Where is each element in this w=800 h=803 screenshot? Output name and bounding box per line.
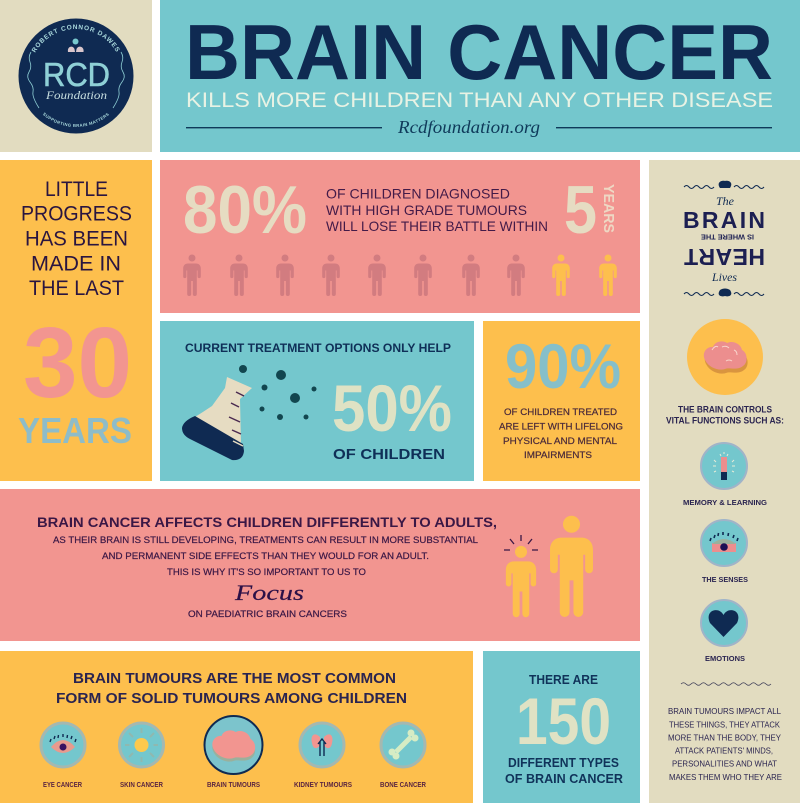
logo badge: SUPPORTING BRAIN MATTERS (43, 112, 109, 127)
description: DIFFERENT TYPES (508, 756, 619, 770)
heading: BRAIN CANCER AFFECTS CHILDREN DIFFERENTLY TO ADULTS, (37, 515, 497, 530)
body text: AND PERMANENT SIDE EFFECTS THAN THEY WOULD FOR AN ADULT. (102, 551, 429, 562)
icon: memory (701, 443, 747, 489)
body text (53, 535, 478, 620)
logo badge: Foundation (45, 88, 107, 102)
years label: YEARS (18, 410, 132, 451)
label: emotions: EMOTIONS (705, 654, 745, 663)
description (505, 756, 623, 786)
icon: eye cancer (41, 723, 85, 767)
icon labels: BRAIN TUMOURS (207, 782, 260, 789)
progress text (21, 178, 132, 300)
description: WILL LOSE THEIR BATTLE WITHIN (326, 218, 548, 234)
icon: flask (182, 365, 316, 460)
icon: brain tumours (204, 716, 262, 774)
stat: 90%: 90% (505, 332, 621, 402)
icon labels: EYE CANCER (43, 782, 82, 789)
icon labels: SKIN CANCER (120, 782, 163, 789)
controls text: THE BRAIN CONTROLS (678, 404, 772, 414)
progress text: THE LAST (29, 277, 124, 300)
description: OF CHILDREN TREATED (504, 407, 617, 418)
logo badge: RCD (43, 56, 110, 93)
heading: FORM OF SOLID TUMOURS AMONG CHILDREN (56, 691, 407, 707)
closing paragraph: BRAIN TUMOURS IMPACT ALL (668, 706, 781, 716)
icon: senses (701, 520, 747, 566)
label: memory: MEMORY & LEARNING (683, 498, 767, 507)
stat: 50%: 50% (332, 371, 452, 445)
icon: kidney tumours (300, 723, 344, 767)
heading (56, 671, 407, 707)
logo badge: ROBERT CONNOR DAWES (32, 24, 120, 52)
icon labels: BONE CANCER (380, 782, 426, 789)
number: 30: 30 (23, 307, 132, 419)
brain heart motto: Lives (711, 270, 737, 284)
description (326, 186, 548, 234)
icon: heart (701, 600, 747, 646)
closing paragraph: MORE THAN THE BODY, THEY (668, 732, 781, 742)
panel: common tumours (0, 651, 473, 803)
controls text: VITAL FUNCTIONS SUCH AS: (666, 416, 784, 426)
closing paragraph: THESE THINGS, THEY ATTACK (669, 720, 780, 730)
description: OF CHILDREN DIAGNOSED (326, 186, 510, 202)
panel: logo (0, 0, 152, 152)
of children: OF CHILDREN (333, 446, 445, 463)
brain heart motto: The (716, 194, 735, 208)
brain heart motto: HEART (684, 244, 765, 270)
subtitle: KILLS MORE CHILDREN THAN ANY OTHER DISEASE (186, 89, 773, 112)
brain heart motto: BRAIN (683, 207, 765, 233)
brain heart motto: IS WHERE THE (701, 232, 754, 242)
closing paragraph: PERSONALITIES AND WHAT (672, 758, 777, 768)
icon: bone cancer (381, 723, 425, 767)
progress text: PROGRESS (21, 202, 132, 226)
icon labels (43, 782, 426, 789)
stat: 80%: 80% (183, 172, 307, 248)
controls text (666, 404, 784, 426)
stat: 150: 150 (516, 684, 611, 758)
heading: CURRENT TREATMENT OPTIONS ONLY HELP (185, 343, 451, 355)
progress text: LITTLE (45, 178, 108, 201)
panel: 80 percent (160, 160, 640, 313)
icon: skin cancer (120, 723, 164, 767)
brain heart motto (683, 181, 765, 296)
body text: Focus (234, 580, 304, 605)
stat: 5: 5 (564, 172, 597, 248)
years vertical: YEARS (600, 184, 617, 233)
label: senses: THE SENSES (702, 575, 748, 584)
panel: 90 percent (483, 321, 640, 481)
icon labels: KIDNEY TUMOURS (294, 782, 352, 789)
panel: 150 types (483, 651, 640, 803)
panel: little progress (0, 160, 152, 481)
panel: treatment (160, 321, 474, 481)
website: Rcdfoundation.org (397, 117, 540, 137)
body text: AS THEIR BRAIN IS STILL DEVELOPING, TREATMENTS CAN RESULT IN MORE SUBSTANTIAL (53, 535, 478, 546)
description: WITH HIGH GRADE TUMOURS (326, 202, 527, 218)
panel: sidebar (649, 160, 800, 803)
icon: child and adult (504, 516, 593, 617)
body text: THIS IS WHY IT'S SO IMPORTANT TO US TO (167, 567, 366, 578)
progress text: MADE IN (31, 252, 121, 276)
description: OF BRAIN CANCER (505, 772, 623, 786)
description: PHYSICAL AND MENTAL (503, 436, 617, 447)
people row (183, 254, 617, 296)
panel: header (160, 0, 800, 152)
logo badge (18, 18, 134, 134)
panel: differently to adults (0, 489, 640, 641)
closing paragraph: ATTACK PATIENTS' MINDS, (675, 746, 773, 756)
title: BRAIN CANCER (185, 8, 773, 96)
description (499, 407, 623, 461)
description: ARE LEFT WITH LIFELONG (499, 422, 623, 432)
closing paragraph (668, 706, 782, 782)
icon: brain (687, 319, 763, 395)
description: IMPAIRMENTS (524, 450, 592, 461)
there are: THERE ARE (529, 673, 598, 687)
progress text: HAS BEEN (25, 228, 128, 250)
heading: BRAIN TUMOURS ARE THE MOST COMMON (73, 671, 396, 687)
closing paragraph: MAKES THEM WHO THEY ARE (669, 772, 782, 782)
body text: ON PAEDIATRIC BRAIN CANCERS (188, 609, 347, 620)
